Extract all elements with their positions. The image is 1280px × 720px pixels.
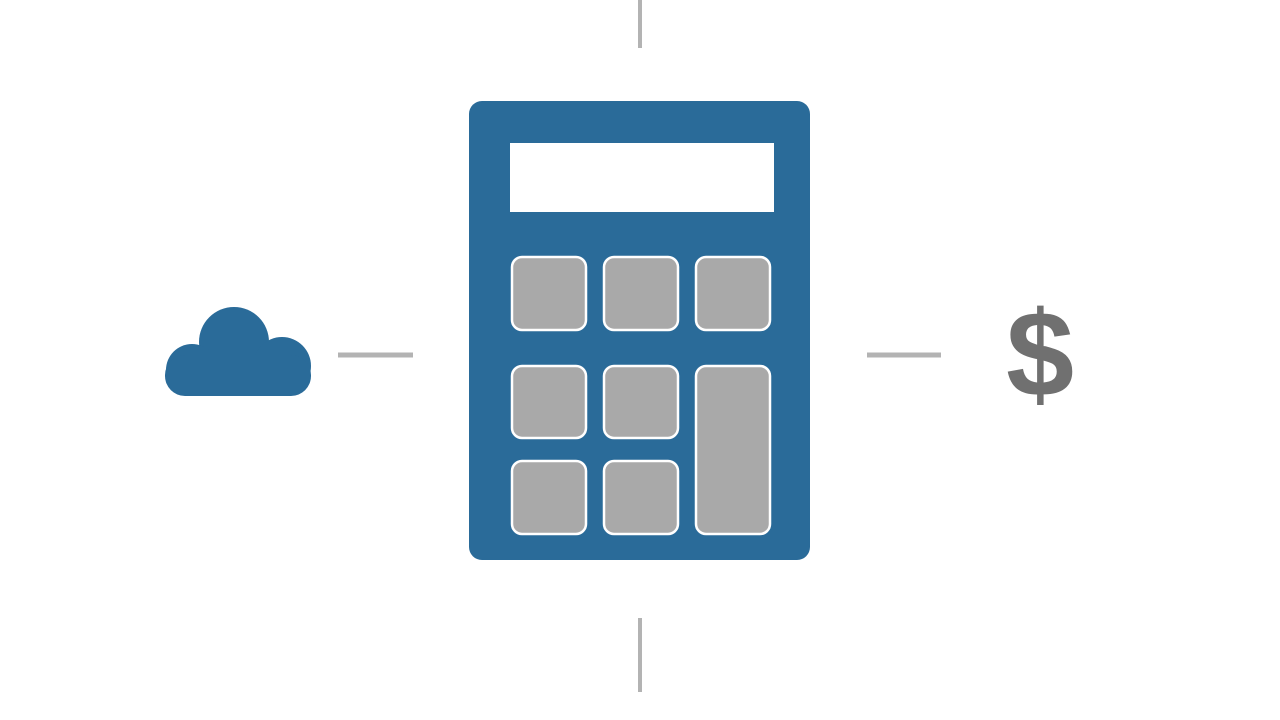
connector line: top [638, 0, 642, 48]
connector line: bottom [638, 618, 642, 692]
calculator keys [512, 257, 770, 534]
icon: dollar sign: $ [1006, 286, 1074, 422]
icon: cloud [165, 307, 311, 396]
calculator screen [510, 143, 774, 212]
connector line: left [338, 352, 413, 358]
connector line: right [867, 352, 941, 358]
icon: calculator [469, 101, 810, 560]
